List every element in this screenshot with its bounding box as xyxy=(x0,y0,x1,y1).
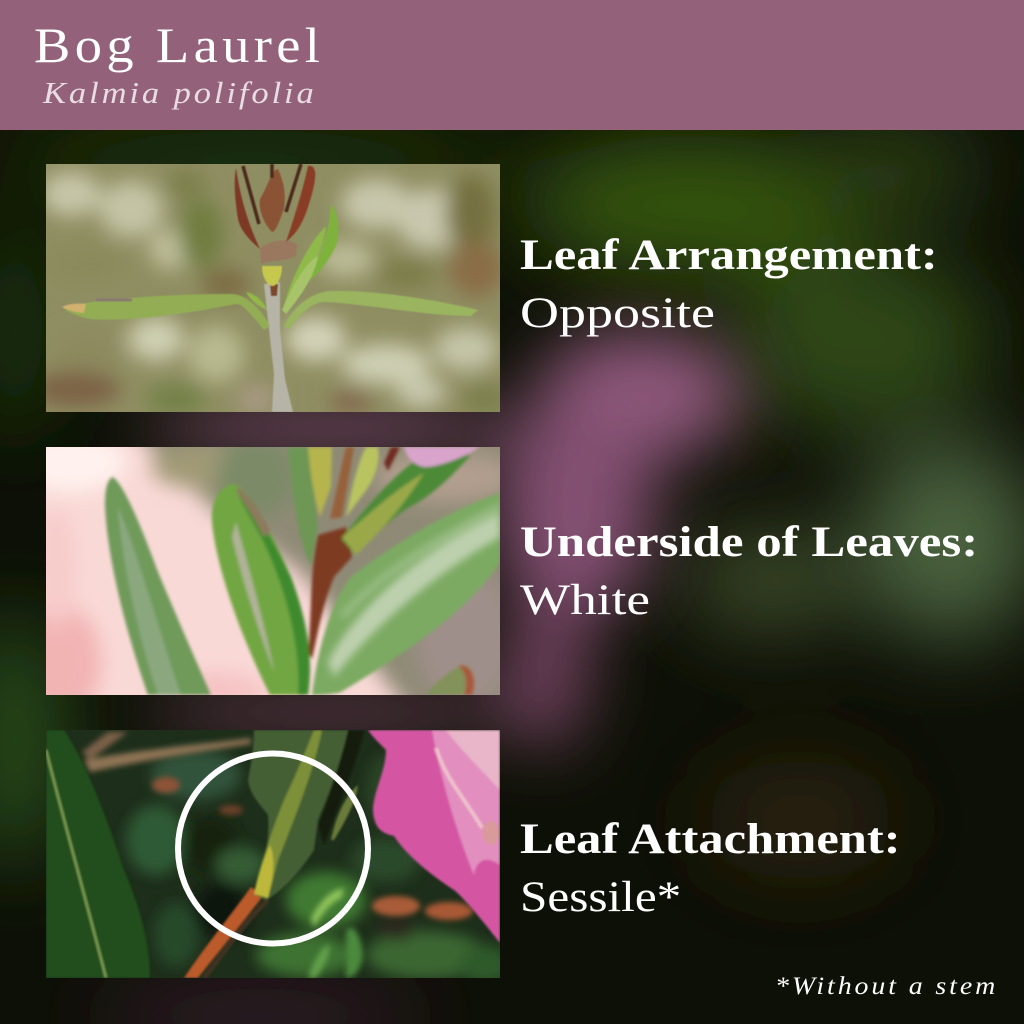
text: leaf attachment: Sessile* xyxy=(520,874,681,921)
dark leaves behind stem xyxy=(288,447,318,565)
photo: opposite leaves xyxy=(46,164,500,412)
clasping leaf xyxy=(248,730,348,900)
photo: sessile leaf attachment xyxy=(46,730,500,978)
dark backdrop right of finger xyxy=(121,417,526,727)
header band xyxy=(0,0,1024,130)
orange stem xyxy=(184,887,263,978)
centre leaf xyxy=(212,484,309,695)
title: Bog Laurel xyxy=(34,17,324,73)
text: underside of leaves xyxy=(520,519,978,624)
flower petal xyxy=(404,447,480,467)
text: leaf attachment: Leaf Attachment: xyxy=(520,816,901,863)
yellow bud xyxy=(262,266,282,286)
text: leaf arrangement xyxy=(520,232,938,337)
text: underside of leaves: Underside of Leaves: xyxy=(520,519,978,566)
right leaf xyxy=(312,493,500,695)
left leaf xyxy=(105,477,211,695)
upper green leaf xyxy=(341,455,471,555)
photo: underside of leaves xyxy=(46,447,500,695)
text: leaf attachment xyxy=(520,816,901,921)
brown capsule xyxy=(235,168,260,249)
reddish stem xyxy=(330,447,354,519)
pink flower xyxy=(368,730,500,943)
stem xyxy=(264,282,293,412)
text: leaf arrangement: Leaf Arrangement: xyxy=(520,232,938,279)
upright green leaves xyxy=(284,226,326,309)
lower bud xyxy=(426,665,474,695)
small bud leaf xyxy=(246,292,267,310)
dark leaf and side leaf xyxy=(318,730,364,845)
scientific name: Kalmia polifolia xyxy=(43,75,317,110)
large left leaf xyxy=(46,730,150,978)
right leaf xyxy=(284,291,478,329)
highlight circle xyxy=(178,754,368,944)
text: leaf arrangement: Opposite xyxy=(520,290,715,337)
left leaf xyxy=(62,294,270,330)
footnote: *Without a stem xyxy=(775,973,998,1000)
text: underside of leaves: White xyxy=(520,577,650,624)
